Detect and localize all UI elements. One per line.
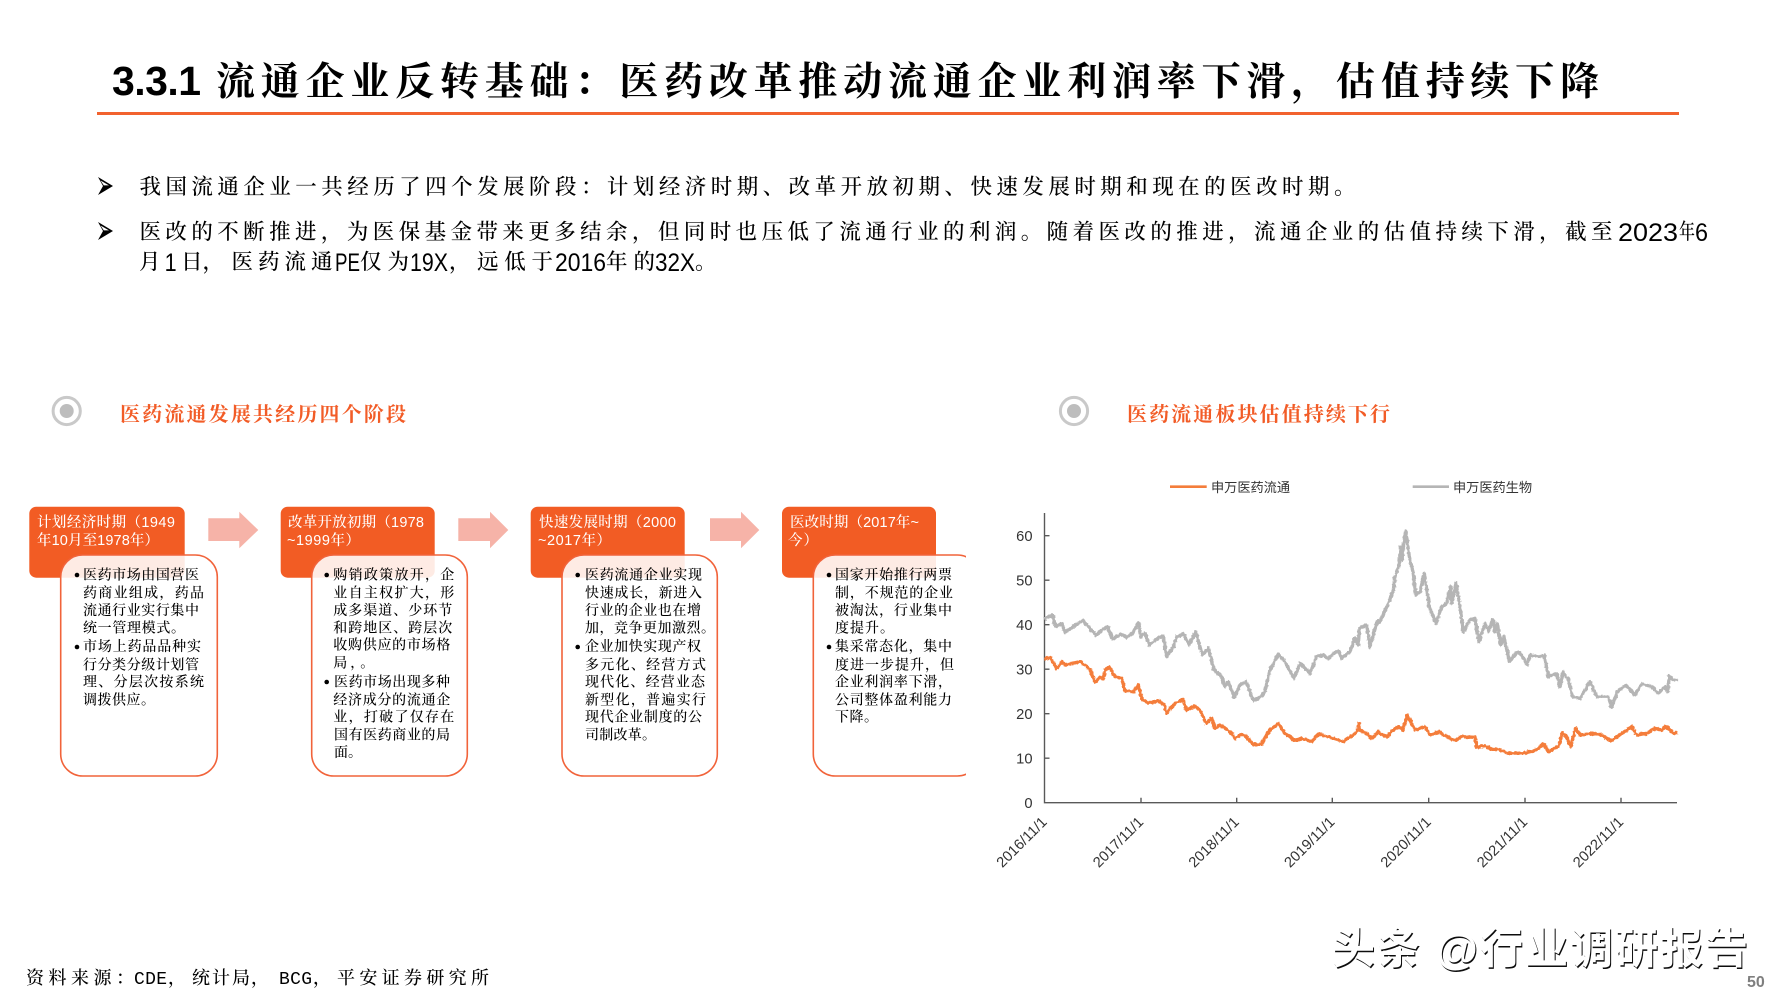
stage 4 details: 公司整体盈利能力 [835, 692, 952, 708]
title: 3.3.1 [112, 58, 201, 104]
stage 4 header [782, 507, 936, 578]
chart legend [1170, 480, 1532, 495]
stage 2 details: 经济成分的流通企 [333, 692, 450, 708]
panel heading: stages: 医药流通发展共经历四个阶段 [120, 402, 406, 426]
line chart [994, 480, 1678, 871]
stage 3 details: 医药流通企业实现 [585, 566, 702, 582]
stage 2 details [312, 555, 467, 776]
stage 2 header: 改革开放初期（1978 [288, 513, 424, 531]
stage 2 details: 医药市场出现多种 [334, 674, 450, 690]
stage 4 header: 医改时期（2017年~ [790, 513, 919, 531]
stage 3 details: 行业的企业也在增 [585, 602, 701, 618]
stage 4 details: 制，不规范的企业 [835, 584, 953, 602]
source note: CDE [134, 970, 167, 990]
bullet text 2: 医药流通 [232, 250, 332, 274]
stage 4 details: 国家开始推行两票 [835, 566, 952, 582]
stage 2 details: 业自主权扩大，形 [333, 584, 454, 602]
stage 2 details: 局，。 [333, 654, 374, 672]
arrow 3 [710, 512, 759, 548]
stage 3 details: 企业加快实现产权 [585, 638, 701, 654]
icon: radio bullet [53, 397, 80, 425]
bullet text 2: 年的 [606, 250, 655, 274]
bullet arrow 2 [98, 222, 113, 240]
chart axes [1044, 513, 1677, 803]
stage 1 details: 调拨供应。 [83, 692, 155, 708]
bullet text 1: 我国流通企业一共经历了四个发展阶段：计划经济时期、改革开放初期、快速发展时期和现在的医改时期。 [140, 175, 1356, 199]
panel heading: valuation: 医药流通板块估值持续下行 [1127, 402, 1390, 426]
bullet text 2: 。 [695, 250, 717, 274]
stage 2 details: 成多渠道、少环节 [333, 602, 452, 618]
bullet text 2: 年 [1679, 220, 1695, 244]
x axis labels [994, 814, 1627, 871]
stage 1 [29, 507, 217, 776]
page number: 50 [1747, 974, 1765, 991]
stage 4 [782, 507, 979, 776]
stage 3 details: 现代化、经营业态 [585, 674, 706, 690]
source note: BCG [279, 970, 312, 990]
watermark: 头条 @行业调研报告 [1333, 927, 1749, 975]
bullet text 2: 月 [139, 250, 161, 274]
stage 1 details: 流通行业实行集中 [83, 602, 199, 618]
stage 4 header: 今） [788, 531, 818, 549]
chart legend: 申万医药流通 [1211, 480, 1290, 495]
stage 2 details: 面。 [334, 744, 362, 760]
bullet text 2: 2016 [555, 249, 606, 277]
stage 3 details: 司制改革。 [585, 726, 656, 742]
source note: ， [313, 970, 331, 990]
stage 1 header: 计划经济时期（1949 [37, 513, 175, 531]
source note: 资料来源： [26, 968, 134, 990]
bullet text 2: PE [335, 249, 360, 277]
stage 3 details: 多元化、经营方式 [585, 656, 706, 672]
series: 申万医药生物 [1044, 531, 1678, 707]
icon: radio bullet [1060, 397, 1088, 425]
stage 1 details: 行分类分级计划管 [83, 656, 199, 672]
y axis labels: 60 [1016, 529, 1032, 545]
panel heading: stages [53, 397, 406, 426]
x axis labels: 2019/11/1 [1282, 814, 1338, 871]
source note: 平安证券研究所 [337, 968, 489, 990]
stage 3 header: 快速发展时期（2000 [539, 513, 676, 531]
stage 3 details: 现代企业制度的公 [585, 708, 702, 724]
bullet text 2: 19X [410, 249, 448, 277]
y axis labels: 10 [1016, 752, 1032, 768]
stage 2 [281, 507, 467, 776]
bullet text 2: 2023 [1618, 219, 1678, 247]
x axis labels: 2016/11/1 [994, 814, 1051, 871]
bullet text 2: 医改的不断推进，为医保基金带来更多结余，但同时也压低了流通行业的利润。随着医改的推进，流通企业的估值持续下滑，截至 [140, 220, 1612, 245]
y axis labels: 0 [1024, 796, 1032, 812]
stage 1 details: 医药市场由国营医 [83, 566, 199, 582]
stage 1 details: 药商业组成，药品 [83, 584, 204, 602]
arrow 1 [208, 512, 258, 548]
x axis labels: 2018/11/1 [1186, 814, 1243, 871]
bullet text 2: 仅为 [360, 250, 409, 274]
stage 1 header: 年10月至1978年） [37, 531, 159, 549]
stage 3 details: 加，竞争更加激烈。 [585, 620, 715, 636]
stage 1 details: 理、分层次按系统 [83, 674, 205, 690]
stage 1 header [29, 507, 185, 578]
stage 1 details [61, 555, 217, 776]
bullet text 2: 32X [655, 249, 695, 277]
bullet text 2: 1 [165, 249, 177, 277]
stage 4 details: 下降。 [835, 708, 878, 724]
stage 2 header [281, 507, 435, 578]
stage 2 details: 国有医药商业的局 [334, 726, 450, 742]
x axis labels: 2017/11/1 [1090, 814, 1147, 871]
bullet text 2: 日， [181, 250, 224, 275]
x axis labels: 2020/11/1 [1378, 814, 1435, 871]
bullet text block [98, 175, 1708, 277]
stage 2 details: 和跨地区、跨层次 [333, 620, 452, 636]
stage 4 details: 集采常态化，集中 [835, 638, 952, 655]
stage 2 header: ~1999年） [287, 531, 360, 549]
stage 1 details: 统一管理模式。 [83, 620, 185, 636]
stage 4 details: 企业利润率下滑， [835, 674, 952, 690]
stage 2 details: 购销政策放开，企 [333, 566, 454, 584]
source note: ， [168, 970, 186, 990]
series: 申万医药流通 [1044, 657, 1678, 753]
source note: 统计局 [192, 968, 250, 990]
source note: ， [251, 970, 269, 990]
y axis labels: 30 [1016, 662, 1032, 678]
bullet text 2: 6 [1695, 219, 1708, 247]
stage 2 details: 收购供应的市场格 [333, 636, 450, 652]
stage 3 [531, 507, 717, 776]
title: 流通企业反转基础：医药改革推动流通企业利润率下滑，估值持续下降 [216, 61, 1599, 105]
stage 1 details: 市场上药品品种实 [83, 638, 201, 654]
chart legend: 申万医药生物 [1453, 480, 1532, 495]
x axis labels: 2021/11/1 [1474, 814, 1531, 871]
x axis labels: 2022/11/1 [1570, 814, 1627, 871]
stage 3 header [531, 507, 685, 578]
bullet text 2 [139, 219, 1708, 277]
stage 4 details: 度进一步提升，但 [835, 656, 954, 674]
y axis labels: 40 [1016, 618, 1032, 634]
bullet text 2: ， [449, 250, 471, 275]
y axis labels: 50 [1016, 574, 1032, 590]
panel heading: valuation [1060, 397, 1390, 426]
stage 3 details: 新型化，普遍实行 [585, 692, 706, 708]
stage 2 details: 业，打破了仅存在 [333, 708, 454, 726]
arrow 2 [458, 512, 508, 548]
stage 4 details: 被淘汰，行业集中 [835, 602, 952, 619]
source note [26, 968, 489, 990]
stage 3 details: 快速成长，新进入 [585, 584, 702, 602]
stage 3 header: ~2017年） [538, 531, 611, 549]
bullet text 2: 远低于 [477, 250, 553, 274]
title underline [97, 112, 1679, 115]
stage 4 details: 度提升。 [835, 620, 894, 636]
y axis labels: 20 [1016, 707, 1032, 723]
stage 3 details [562, 555, 717, 776]
stage 4 details [813, 555, 979, 776]
y axis labels [1016, 529, 1032, 812]
bullet arrow 1 [98, 177, 113, 195]
